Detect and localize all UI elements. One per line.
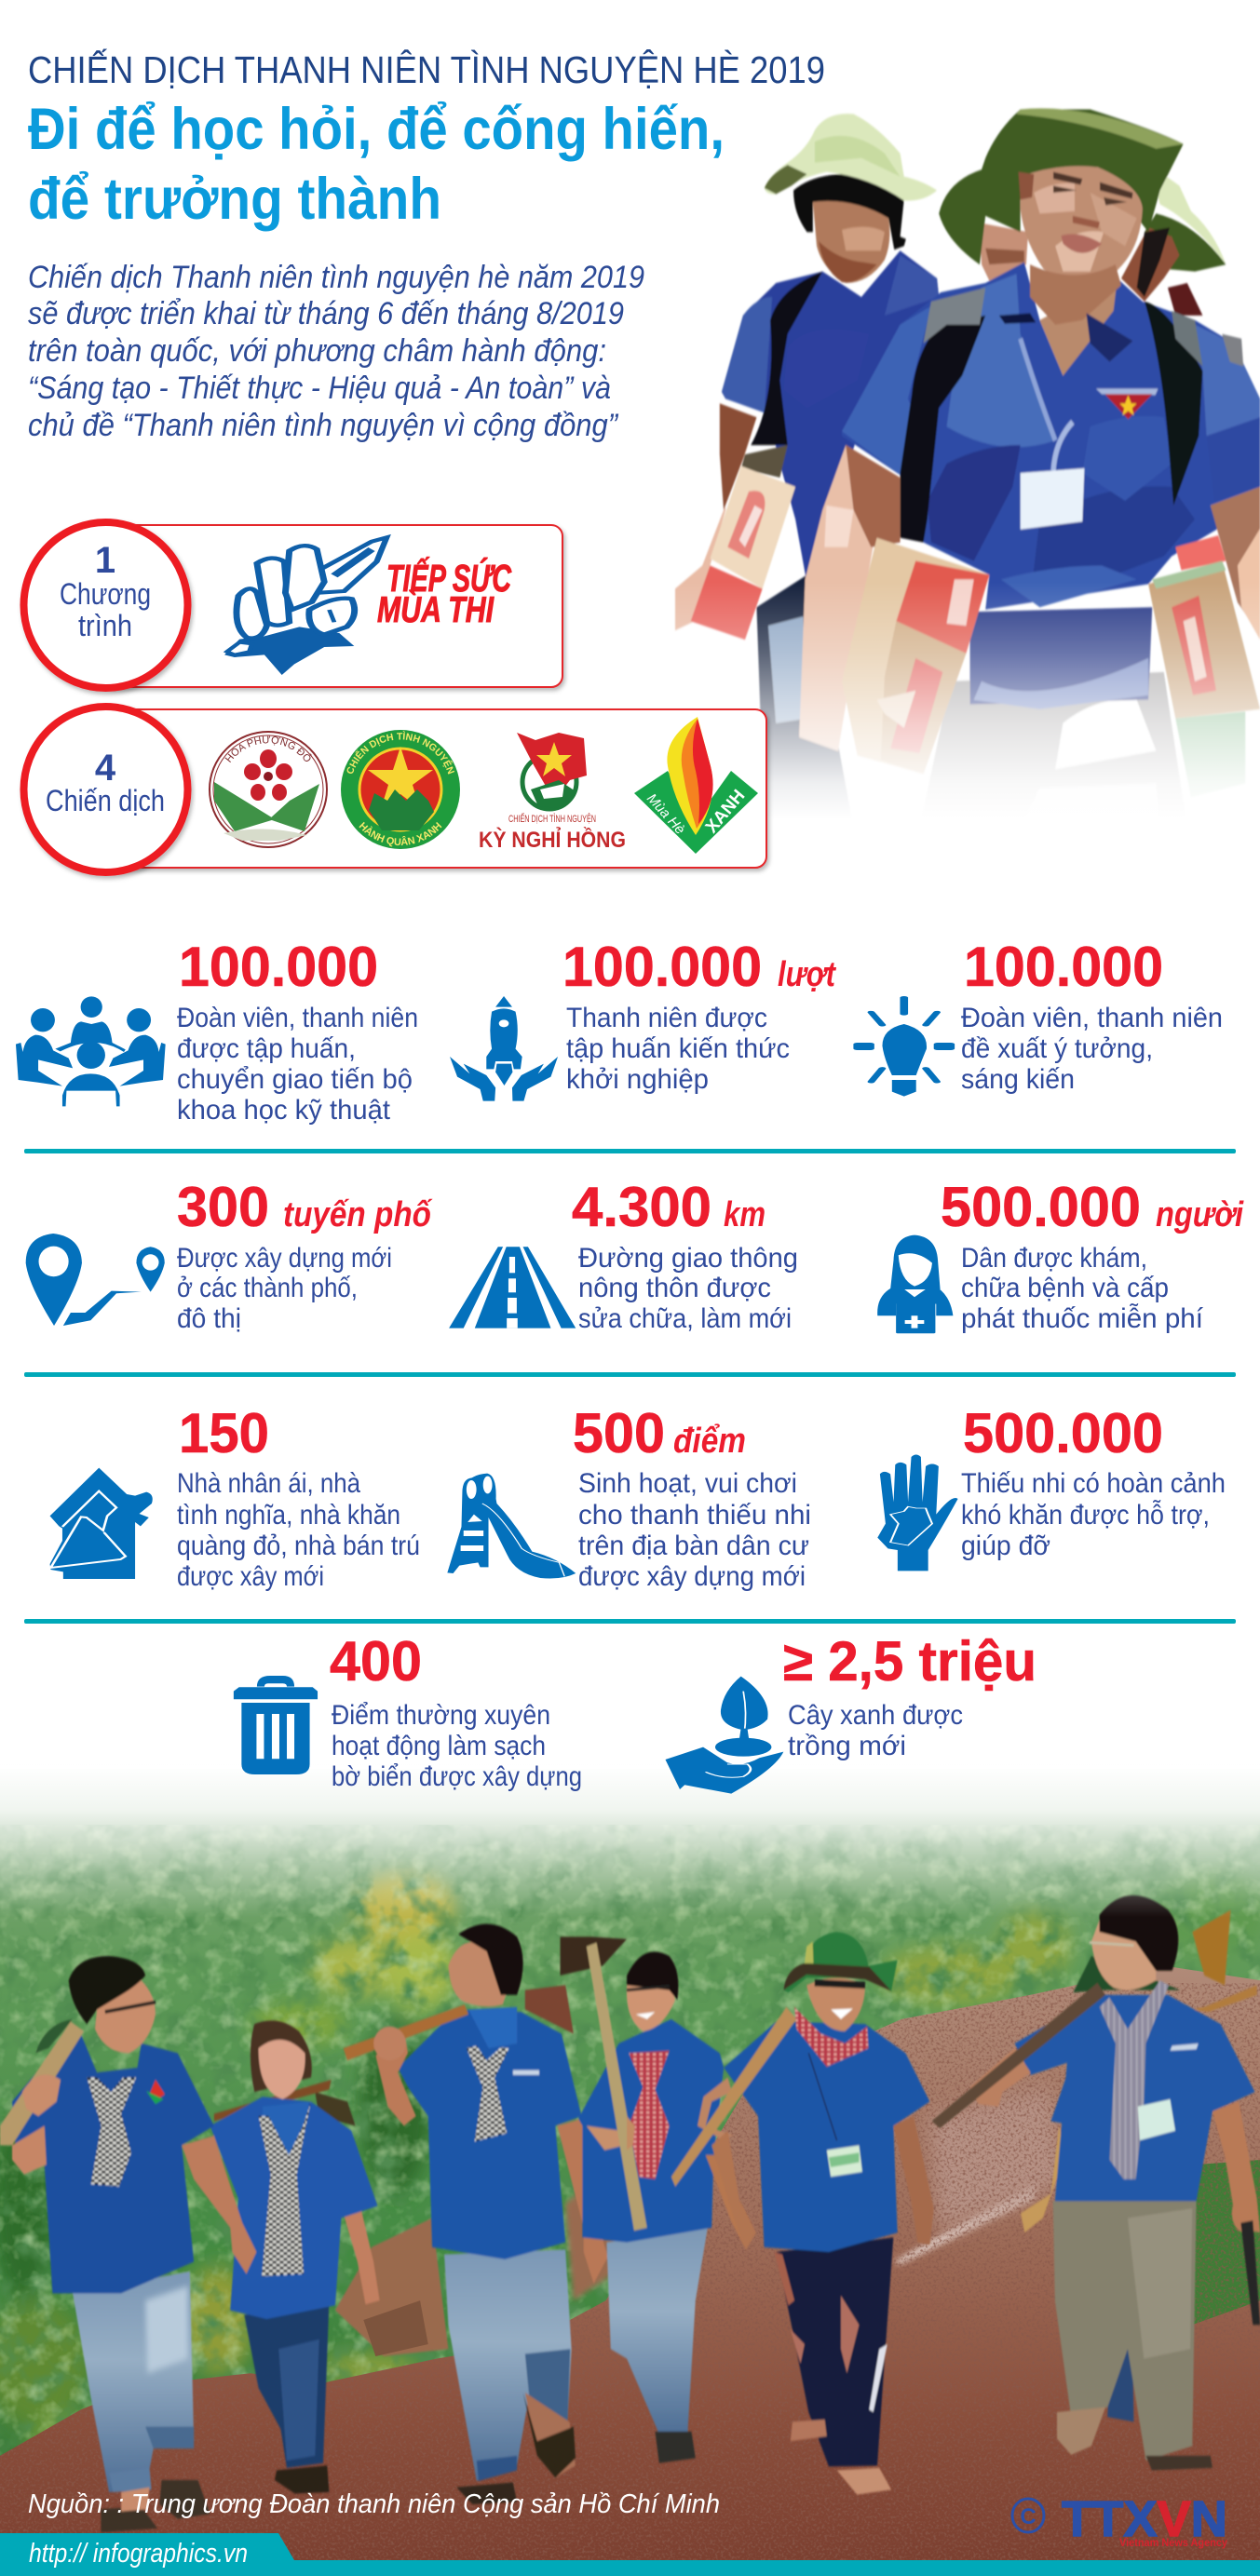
logo: Kỳ nghỉ hồng: CHIẾN DỊCH TÌNH NGUYỆN <box>508 813 596 825</box>
person 5: man in green hat <box>671 1932 934 2495</box>
stat: 4.300 km roads: sửa chữa, làm mới <box>578 1303 792 1334</box>
intro paragraph: trên toàn quốc, với phương châm hành động: <box>28 333 606 369</box>
stat: 500 playgrounds: trên địa bàn dân cư <box>578 1531 809 1561</box>
logo: TTXVN: C <box>1020 2504 1036 2529</box>
stat: 100.000 ideas: sáng kiến <box>961 1064 1075 1095</box>
stat: 300 streets: 300 <box>177 1176 269 1238</box>
stat: 500.000 patients: Dân được khám, <box>961 1243 1147 1274</box>
stat: 300 streets: ở các thành phố, <box>177 1273 358 1303</box>
badge: 4 campaigns: Chiến dịch <box>46 784 165 817</box>
stat: 300 streets: Được xây dựng mới <box>177 1243 392 1274</box>
stat: 500 playgrounds: Sinh hoạt, vui chơi <box>578 1468 797 1499</box>
stat: 100.000 startup trainings: tập huấn kiến thức <box>566 1033 790 1064</box>
bottom photo: young volunteers walking <box>0 1764 1260 2576</box>
badge: 4 campaigns: 4 <box>95 748 116 789</box>
intro paragraph: Chiến dịch Thanh niên tình nguyện hè năm 2019 <box>28 260 644 295</box>
stat: 100.000 trained members: khoa học kỹ thuật <box>177 1095 391 1126</box>
stat: 100.000 trained members: được tập huấn, <box>177 1033 356 1064</box>
icon: road <box>449 1247 576 1328</box>
icon: plant in hand <box>665 1677 783 1794</box>
stat: 400 beaches: bờ biển được xây dựng <box>332 1761 582 1792</box>
back volunteer <box>980 172 1226 316</box>
icon: people at a table <box>16 996 166 1106</box>
intro paragraph: “Sáng tạo - Thiết thực - Hiệu quả - An toàn” và <box>28 371 611 406</box>
stat: 100.000 startup trainings: 100.000 <box>562 936 762 998</box>
panel: 1 program <box>24 522 562 688</box>
stat: 100.000 trained members <box>16 936 418 1126</box>
logo: Hoa phượng đỏ <box>209 731 328 848</box>
logo: Hoa phượng đỏ: HOA PHƯỢNG ĐỎ <box>225 735 312 762</box>
icon: rocket and hands <box>450 996 558 1101</box>
title: Đi để học hỏi, để cống hiến, <box>28 97 725 162</box>
logo: Mùa hè xanh: XANH <box>702 786 749 837</box>
logo: TTXVN: Vietnam News Agency <box>1119 2536 1227 2549</box>
badge: 1 program: Chương <box>60 577 151 611</box>
stat: 400 beaches <box>234 1630 582 1792</box>
stat: 500 playgrounds: điểm <box>673 1422 746 1461</box>
stat: 150 houses: quàng đỏ, nhà bán trú <box>177 1531 420 1561</box>
panel: 4 campaigns <box>20 703 771 881</box>
stat: 4.300 km roads: 4.300 <box>572 1176 711 1238</box>
stat: 150 houses: Nhà nhân ái, nhà <box>177 1468 360 1499</box>
footer bar <box>0 2533 1260 2576</box>
divider lines <box>24 1149 1236 1624</box>
stat: 100.000 trained members: 100.000 <box>179 936 378 998</box>
source note: Nguồn: : Trung ương Đoàn thanh niên Cộng sản Hồ Chí Minh <box>28 2489 720 2519</box>
stat: 4.300 km roads <box>449 1176 798 1334</box>
intro paragraph: chủ đề “Thanh niên tình nguyện vì cộng đồng” <box>28 408 619 443</box>
icon: doctor <box>877 1235 953 1333</box>
logo: Hành quân xanh <box>341 730 460 849</box>
photo background: forest <box>0 1769 1260 2576</box>
person 2: woman <box>210 2020 380 2493</box>
icon: map pins and route <box>26 1234 165 1326</box>
intro paragraph <box>28 260 644 443</box>
stat: 500.000 children: 500.000 <box>963 1402 1163 1464</box>
stat: 100.000 startup trainings: Thanh niên được <box>566 1003 767 1033</box>
icon: slide <box>447 1474 576 1579</box>
red soil path <box>0 1966 1260 2576</box>
stat: 500 playgrounds: được xây dựng mới <box>578 1561 806 1592</box>
stat: 4.300 km roads: km <box>724 1195 765 1234</box>
stat: 500.000 patients <box>877 1176 1244 1334</box>
stat: 400 beaches: hoạt động làm sạch <box>332 1731 546 1761</box>
stat: 100.000 ideas: Đoàn viên, thanh niên <box>961 1003 1223 1033</box>
stat: 500.000 children: khó khăn được hỗ trợ, <box>961 1500 1210 1531</box>
logo: Mùa hè xanh: Mùa Hè <box>644 790 688 838</box>
logo: Hành quân xanh: CHIẾN DỊCH TÌNH NGUYỆN <box>346 731 454 775</box>
stat: 2.5 million trees: trồng mới <box>788 1731 906 1761</box>
stat: 500.000 children: Thiếu nhi có hoàn cảnh <box>961 1468 1226 1499</box>
stat: 2.5 million trees: ≥ 2,5 triệu <box>783 1630 1036 1693</box>
badge: 4 campaigns <box>24 707 188 872</box>
stat: 4.300 km roads: nông thôn được <box>578 1273 771 1303</box>
stat: 300 streets: đô thị <box>177 1303 241 1334</box>
stat: 500.000 patients: phát thuốc miễn phí <box>961 1303 1204 1334</box>
logo: Tiếp sức mùa thi <box>224 537 512 675</box>
logo: Tiếp sức mùa thi: MÙA THI <box>377 589 495 630</box>
logo: Kỳ nghỉ hồng <box>479 733 626 853</box>
stat: 2.5 million trees: Cây xanh được <box>788 1700 963 1731</box>
logo: Kỳ nghỉ hồng: KỲ NGHỈ HỒNG <box>479 826 626 853</box>
logo: Tiếp sức mùa thi: TIẾP SỨC <box>386 557 512 600</box>
icon: house and trowel <box>50 1468 153 1579</box>
stat: 100.000 startup trainings: lượt <box>778 955 836 994</box>
badge: 1 program: trình <box>78 609 132 642</box>
stat: 300 streets <box>26 1176 433 1334</box>
person 4: smiling man with hoe <box>561 1936 756 2463</box>
logo: Mùa hè xanh <box>634 717 758 854</box>
stat: 100.000 startup trainings: khởi nghiệp <box>566 1064 709 1095</box>
stat: 500.000 patients: người <box>1156 1195 1244 1234</box>
person 3: man with hoe <box>344 1924 608 2504</box>
stat: 150 houses: tình nghĩa, nhà khăn <box>177 1500 400 1531</box>
intro paragraph: sẽ được triển khai từ tháng 6 đến tháng 8/2019 <box>28 296 624 331</box>
stat: 100.000 ideas: đề xuất ý tưởng, <box>961 1033 1153 1064</box>
stat: 500.000 patients: 500.000 <box>941 1176 1141 1238</box>
person 6: man with gray scarf <box>932 1895 1260 2470</box>
icon: light bulb <box>853 996 955 1097</box>
stat: 150 houses: 150 <box>179 1402 269 1464</box>
illustration: volunteers with boxes <box>596 108 1260 861</box>
stat: 2.5 million trees <box>665 1630 1036 1794</box>
hoe blades behind people <box>35 1985 574 2126</box>
stat: 100.000 trained members: Đoàn viên, thanh niên <box>177 1003 418 1033</box>
photo fog overlay <box>0 1764 1260 1918</box>
person 1: man with glasses <box>0 1956 256 2532</box>
header: campaign name: CHIẾN DỊCH THANH NIÊN TÌNH NGUYỆN HÈ 2019 <box>28 48 825 91</box>
soil grain <box>0 1983 1260 2560</box>
footer bar: http:// infographics.vn <box>29 2539 248 2569</box>
title: để trưởng thành <box>28 167 441 232</box>
title <box>28 97 725 232</box>
stat: 400 beaches: 400 <box>330 1630 422 1693</box>
main volunteer <box>799 108 1260 829</box>
logo: Hành quân xanh: HÀNH QUÂN XANH <box>359 821 441 847</box>
stat: 500.000 patients: chữa bệnh và cấp <box>961 1273 1169 1303</box>
stat: 150 houses: được xây mới <box>177 1561 324 1592</box>
stat: 100.000 ideas: 100.000 <box>964 936 1163 998</box>
icon: trash bin <box>234 1676 318 1774</box>
stat: 500.000 children <box>877 1402 1226 1571</box>
stat: 100.000 ideas <box>853 936 1223 1097</box>
left volunteer <box>675 114 939 829</box>
badge: 1 program <box>24 522 188 688</box>
stat: 500 playgrounds: cho thanh thiếu nhi <box>578 1500 811 1531</box>
icon: hands <box>877 1454 958 1571</box>
stat: 100.000 trained members: chuyển giao tiến bộ <box>177 1064 413 1095</box>
stat: 300 streets: tuyến phố <box>283 1195 433 1234</box>
stat: 150 houses <box>50 1402 420 1592</box>
stat: 500.000 children: giúp đỡ <box>961 1531 1050 1561</box>
badge: 1 program: 1 <box>95 540 115 581</box>
logo: TTXVN: TTXVN <box>1062 2491 1227 2547</box>
stat: 500 playgrounds <box>447 1402 811 1592</box>
stat: 500 playgrounds: 500 <box>573 1402 665 1464</box>
stat: 100.000 startup trainings <box>450 936 836 1101</box>
stat: 400 beaches: Điểm thường xuyên <box>332 1700 550 1731</box>
stat: 4.300 km roads: Đường giao thông <box>578 1243 798 1274</box>
